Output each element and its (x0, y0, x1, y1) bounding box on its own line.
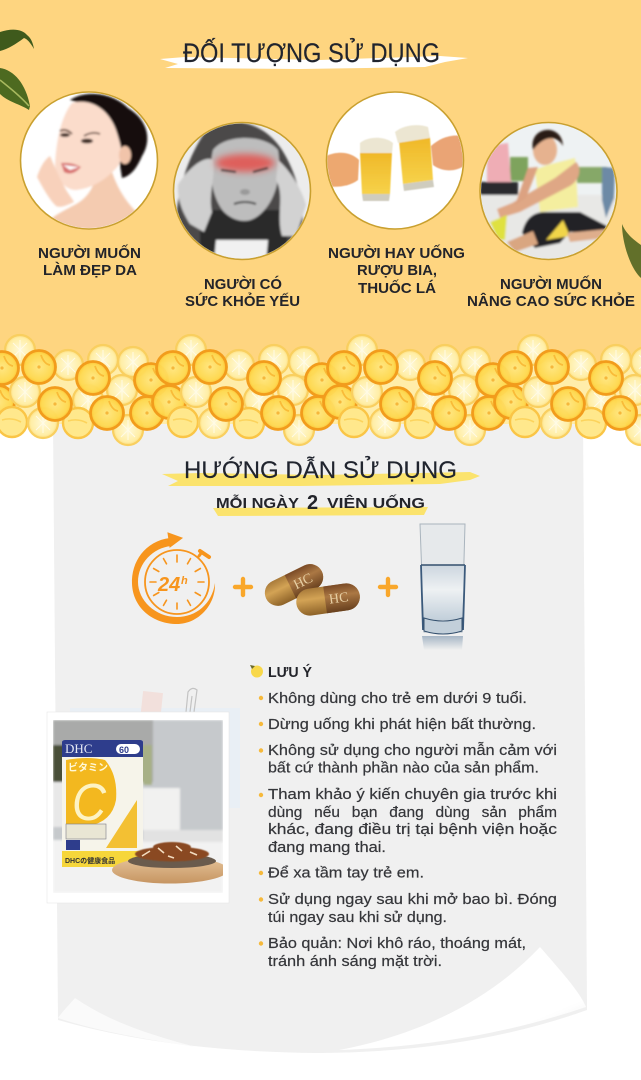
icon: plus 1 (235, 579, 251, 595)
label: fitness: NGƯỜI MUỐN (500, 275, 602, 293)
background paper and paper clip behind the photo (70, 688, 240, 808)
icon: lemon (250, 665, 263, 678)
product pack: C (72, 774, 106, 832)
page curl: bottom right (339, 947, 586, 1050)
notes list: khác, đang điều trị tại bệnh viện hoặc (268, 822, 557, 838)
label: drinkers: THUỐC LÁ (358, 279, 436, 297)
notes list: Bảo quản: Nơi khô ráo, thoáng mát, (268, 936, 526, 952)
plate with capsules (112, 842, 228, 884)
product pack: DHC (65, 741, 92, 756)
icon: capsules: HC (328, 590, 350, 608)
label: fitness: NÂNG CAO SỨC KHỎE (467, 292, 635, 310)
icon: plus 2 (380, 579, 396, 595)
notes list: dùng nếu bạn đang dùng sản phẩm (268, 805, 557, 821)
product pack (62, 740, 143, 867)
notes list (259, 691, 557, 970)
label: beauty (38, 244, 141, 279)
icon: capsules (260, 560, 362, 617)
label: drinkers (328, 244, 465, 297)
product pack: DHCの健康食品 (65, 856, 115, 865)
daily dose subtitle: VIÊN UỐNG (327, 494, 425, 512)
label: fitness (467, 275, 635, 310)
label: weak health: SỨC KHỎE YẾU (185, 292, 300, 310)
label: drinkers: NGƯỜI HAY UỐNG (328, 244, 465, 262)
label: weak health (185, 275, 300, 310)
usage panel (53, 420, 587, 1053)
icon: 24h clock: h (181, 575, 188, 587)
notes list: đang mang thai. (268, 840, 386, 856)
product pack: 60 (119, 745, 129, 755)
icon: 24h clock: 24 (157, 574, 180, 596)
notes list: Không sử dụng cho người mẫn cảm với (268, 742, 557, 759)
label: weak health: NGƯỜI CÓ (204, 275, 282, 293)
audience: weak health (174, 122, 310, 262)
icon: capsules: HC (291, 571, 315, 593)
notes list: Dừng uống khi phát hiện bất thường. (268, 717, 536, 733)
label: beauty: LÀM ĐẸP DA (43, 262, 137, 279)
notes list: túi ngay sau khi sử dụng. (268, 910, 447, 926)
product photo (47, 712, 229, 903)
leaves (0, 30, 641, 278)
notes list: tránh ánh sáng mặt trời. (268, 954, 442, 970)
notes list: Sử dụng ngay sau khi mở bao bì. Đóng (268, 892, 557, 908)
heading brush: yellow (162, 472, 480, 486)
audience: beauty (20, 92, 158, 232)
label: drinkers: RƯỢU BIA, (357, 262, 437, 279)
daily dose subtitle: 2 (307, 492, 318, 514)
product pack: ビタミン (68, 761, 108, 774)
icon: 24h clock (132, 533, 215, 624)
icon: glass of water (420, 524, 465, 650)
note heading: LƯU Ý (268, 663, 312, 681)
top yellow background (0, 0, 641, 372)
audience: drinkers (326, 92, 464, 229)
title: ĐỐI TƯỢNG SỬ DỤNG (183, 38, 440, 68)
notes list: bất cứ thành phần nào của sản phẩm. (268, 760, 539, 776)
notes list: Không dùng cho trẻ em dưới 9 tuổi. (268, 691, 527, 707)
notes list: Tham khảo ý kiến chuyên gia trước khi (268, 787, 557, 803)
daily dose subtitle: MỖI NGÀY (216, 494, 299, 512)
notes list: Để xa tầm tay trẻ em. (268, 866, 424, 882)
page curl: bottom left (58, 998, 196, 1047)
usage title: HƯỚNG DẪN SỬ DỤNG (184, 455, 457, 484)
lemon slices band (0, 335, 641, 445)
heading brush: white (160, 56, 468, 69)
daily dose subtitle (213, 492, 428, 516)
audience: fitness (480, 122, 618, 263)
label: beauty: NGƯỜI MUỐN (38, 244, 141, 262)
